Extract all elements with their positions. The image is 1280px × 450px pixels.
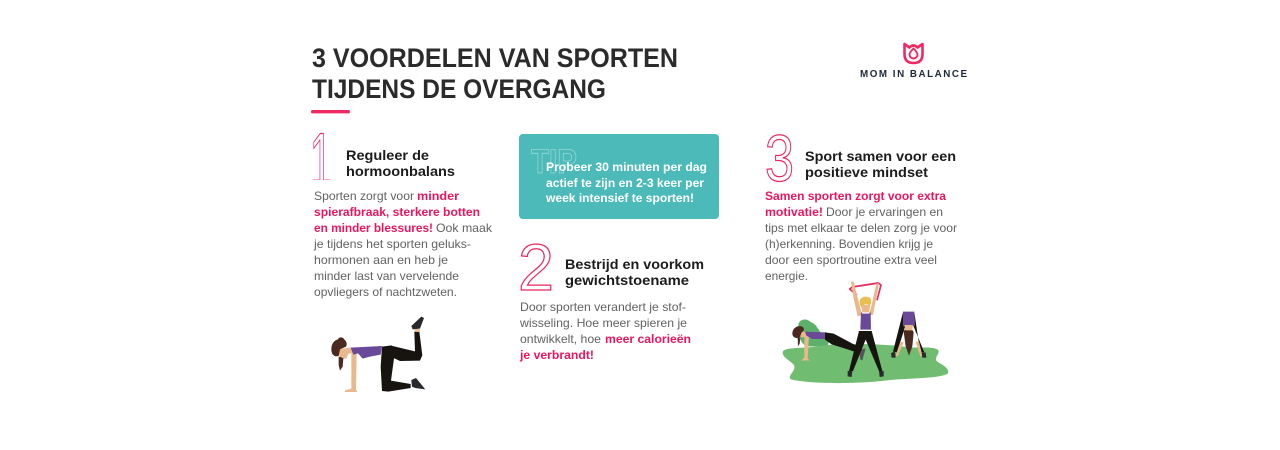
body text 1: minder last van vervelende: [314, 269, 459, 283]
body text 3: (h)erkenning. Bovendien krijg je: [765, 237, 933, 251]
body text 1: Ook maak: [436, 221, 493, 235]
logo: [860, 44, 967, 80]
body text 2: je verbrandt!: [519, 348, 594, 362]
heading 2: gewichtstoename: [565, 272, 689, 288]
heading 3: [805, 148, 956, 180]
tip text: Probeer 30 minuten per dag: [546, 160, 707, 174]
heading 2: [565, 256, 704, 288]
body text 3: tips met elkaar te delen zorg je voor: [765, 221, 957, 235]
tip watermark label: TIP: [531, 143, 577, 181]
body text 1: hormonen aan en heb je: [314, 253, 448, 267]
body text 1: je tijdens het sporten geluks-: [313, 237, 471, 251]
body text 3: [765, 189, 957, 283]
number 2: 2: [518, 230, 554, 304]
icon: tulip logo mark: [904, 44, 922, 63]
tip text: week intensief te sporten!: [545, 191, 694, 205]
panel: benefit 1: [310, 118, 493, 392]
number 1: 1: [310, 118, 332, 203]
heading 1: [346, 147, 455, 179]
tip text: actief te zijn en 2-3 keer per: [546, 176, 704, 190]
illustration: three women exercising on grass: [783, 282, 948, 383]
body text 1: opvliegers of nachtzweten.: [314, 285, 457, 299]
panel: benefit 3: [765, 121, 957, 383]
woman standing with resistance band: [848, 282, 884, 377]
title: TIJDENS DE OVERGANG: [312, 74, 606, 104]
heading 3: positieve mindset: [805, 164, 928, 180]
body text 2: meer calorieën: [605, 332, 691, 346]
illustration: woman doing leg raise on all fours: [331, 317, 425, 392]
heading 2: Bestrijd en voorkom: [565, 256, 704, 272]
body text 2: ontwikkelt, hoe: [520, 332, 601, 346]
title: 3 VOORDELEN VAN SPORTEN: [312, 43, 678, 73]
body text 1: Sporten zorgt voor: [314, 189, 414, 203]
tip text: [545, 160, 707, 205]
grass: [783, 344, 948, 383]
body text 3: Samen sporten zorgt voor extra: [765, 189, 946, 203]
title accent bar: [311, 110, 350, 113]
body text 3: Door je ervaringen en: [826, 205, 943, 219]
panel: benefit 2: [518, 230, 704, 362]
tip background: [519, 134, 719, 219]
number 3: 3: [765, 121, 794, 195]
body text 1: spierafbraak, sterkere botten: [314, 205, 480, 219]
body text 3: motivatie!: [765, 205, 823, 219]
woman bending forward: [891, 312, 926, 358]
logo wordmark: MOM IN BALANCE: [860, 69, 967, 80]
body text 1: minder: [417, 189, 459, 203]
body text 2: wisseling. Hoe meer spieren je: [519, 316, 687, 330]
body text 3: energie.: [765, 269, 808, 283]
heading 1: hormoonbalans: [346, 163, 455, 179]
title: [312, 43, 678, 104]
body text 2: Door sporten verandert je stof-: [520, 300, 686, 314]
body text 2: [519, 300, 691, 362]
body text 3: door een sportroutine extra veel: [765, 253, 937, 267]
woman in plank: [792, 326, 866, 361]
heading 3: Sport samen voor een: [805, 148, 956, 164]
body text 1: en minder blessures!: [314, 221, 433, 235]
body text 1: [313, 189, 493, 299]
panel: tip: [519, 134, 719, 219]
bush: [798, 320, 829, 346]
heading 1: Reguleer de: [346, 147, 429, 163]
